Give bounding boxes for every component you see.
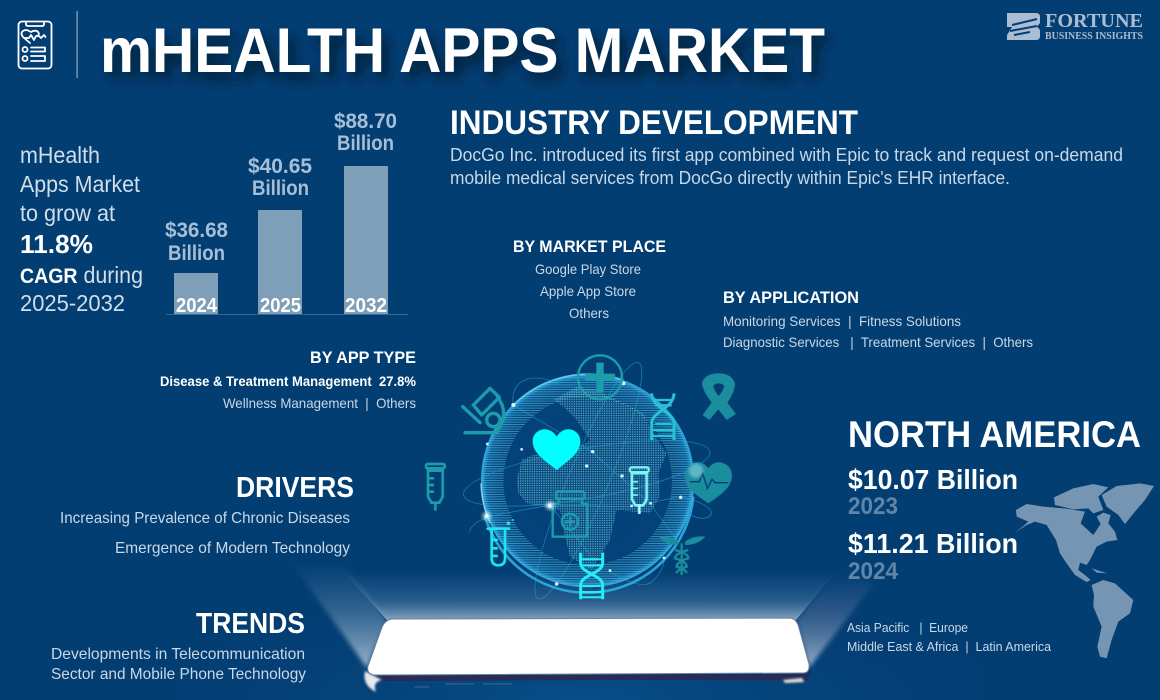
other regions: Middle East & Africa | Latin America: [847, 639, 1052, 654]
drivers: DRIVERS: [236, 472, 354, 504]
bar 2024: Billion: [168, 242, 225, 265]
icon: syringe left: [426, 464, 445, 511]
CAGR statement: mHealth: [20, 142, 100, 168]
drivers: Increasing Prevalence of Chronic Diseases: [60, 510, 350, 527]
industry development: [450, 104, 1123, 188]
north america stats: 2024: [848, 558, 899, 585]
icon: test tube: [488, 529, 509, 565]
by app type: Wellness Management | Others: [223, 395, 416, 411]
other regions: Asia Pacific | Europe: [847, 620, 968, 635]
globe sphere: [481, 374, 694, 593]
icon: vial: [630, 467, 649, 514]
by application: Monitoring Services | Fitness Solutions: [723, 313, 961, 329]
bar 2025: [248, 155, 312, 317]
bar 2032: Billion: [337, 132, 394, 155]
trends: Developments in Telecommunication: [51, 646, 305, 663]
header icon: medical clipboard: [18, 22, 52, 68]
bar 2032: 2032: [345, 295, 387, 317]
icon: medicine bottle: [553, 492, 587, 537]
globe nodes: [485, 381, 698, 586]
by market place: BY MARKET PLACE: [513, 237, 666, 256]
icon: awareness ribbon: [702, 373, 736, 420]
north america stats: $10.07 Billion: [848, 464, 1018, 495]
by market place: Apple App Store: [540, 283, 636, 299]
drivers: Emergence of Modern Technology: [115, 540, 350, 557]
CAGR statement: CAGR during: [20, 262, 143, 288]
phone light beams: [292, 563, 874, 668]
CAGR statement: 2025-2032: [20, 290, 125, 316]
title: mHEALTH APPS MARKET: [100, 16, 825, 86]
phone: [364, 618, 812, 692]
logo: Fortune Business Insights: BUSINESS INSIGHTS: [1045, 31, 1143, 42]
by market place: Google Play Store: [535, 261, 641, 277]
icon: dna top right: [652, 393, 674, 440]
north america stats: NORTH AMERICA: [848, 414, 1141, 455]
bar 2024: $36.68: [165, 219, 228, 242]
trends: TRENDS: [196, 608, 305, 640]
bar chart: market size: [165, 110, 408, 317]
by application: [723, 288, 1033, 350]
by market place: Others: [569, 305, 609, 321]
globe illustration: [426, 355, 736, 607]
orbit lines: [459, 355, 714, 607]
trends: Sector and Mobile Phone Technology: [51, 666, 306, 683]
by app type: BY APP TYPE: [310, 348, 416, 367]
north america stats: 2023: [848, 493, 898, 520]
logo: Fortune Business Insights: [1007, 11, 1143, 42]
CAGR statement: [20, 142, 143, 316]
by market place: [513, 237, 666, 321]
map: Americas: [1015, 483, 1154, 658]
CAGR statement: 11.8%: [20, 229, 93, 259]
icon: dna bottom: [581, 553, 603, 599]
CAGR statement: to grow at: [20, 200, 116, 226]
icon: heart: [533, 429, 580, 470]
icon: caduceus: [659, 536, 705, 575]
header divider: [76, 11, 78, 78]
industry development: mobile medical services from DocGo directly within Epic's EHR interface.: [450, 168, 1010, 188]
by app type: Disease & Treatment Management 27.8%: [160, 374, 416, 389]
trends: [51, 608, 306, 683]
icon: plus in circle: [578, 355, 622, 399]
logo: Fortune Business Insights: FORTUNE: [1045, 11, 1143, 32]
north america stats: $11.21 Billion: [848, 528, 1018, 559]
industry development: DocGo Inc. introduced its first app combined with Epic to track and request on-demand: [450, 145, 1123, 165]
bar 2024: [165, 219, 228, 317]
bar 2025: Billion: [252, 177, 309, 200]
bar 2025: 2025: [260, 295, 301, 317]
by application: BY APPLICATION: [723, 288, 859, 307]
CAGR statement: Apps Market: [20, 171, 141, 197]
bar 2032: [334, 110, 397, 317]
by app type: [160, 348, 416, 411]
north america stats: [848, 414, 1141, 585]
bar 2024: 2024: [176, 295, 218, 317]
drivers: [60, 472, 354, 557]
other regions: [847, 620, 1052, 654]
phone screen: [368, 618, 809, 675]
by application: Diagnostic Services | Treatment Services | Others: [723, 334, 1033, 350]
industry development: INDUSTRY DEVELOPMENT: [450, 104, 858, 142]
bar 2032: $88.70: [334, 110, 397, 133]
bar 2025: $40.65: [248, 155, 312, 178]
icon: microscope: [463, 388, 504, 433]
icon: heart with pulse: [685, 462, 732, 503]
